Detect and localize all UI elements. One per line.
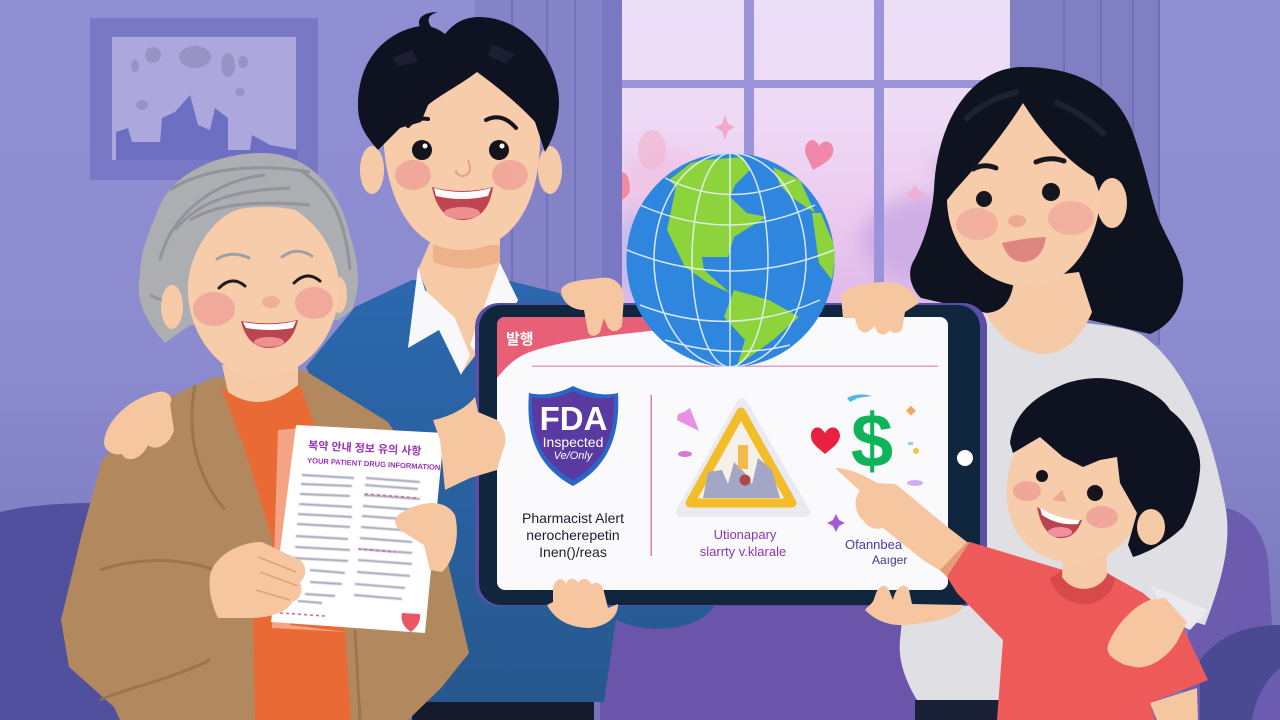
man sweater — [306, 280, 715, 702]
man's hand on granny's shoulder — [104, 392, 174, 459]
hands holding tablet — [433, 278, 963, 628]
floating hearts — [805, 140, 833, 170]
sofa right cushion — [1200, 625, 1280, 720]
child sleeve cuff — [940, 542, 970, 577]
man ears — [360, 146, 562, 194]
right curtain — [1010, 0, 1159, 345]
heart icon — [811, 427, 840, 454]
window clouds — [608, 145, 1010, 300]
granny cheeks — [193, 287, 333, 326]
man hair — [358, 17, 559, 152]
woman hair — [910, 67, 1183, 334]
window — [603, 0, 1010, 345]
paper logo — [402, 613, 420, 632]
child — [835, 378, 1208, 720]
caption three: Ofannbea — [845, 537, 903, 552]
caption three line two: Aaıger — [872, 553, 907, 567]
man eyes and brows — [408, 117, 516, 160]
granny jacket shadows — [100, 385, 360, 720]
paper heading: 복약 안내 정보 유의 사항 — [308, 438, 422, 458]
paper text lines — [293, 475, 420, 603]
man mouth — [432, 187, 493, 220]
granny ears — [161, 277, 347, 329]
graticule — [627, 153, 834, 367]
bottom right hand — [865, 586, 963, 625]
tablet — [475, 303, 987, 606]
man cheeks — [395, 160, 528, 190]
man hair highlight — [392, 44, 515, 66]
verify label: Ve/Only — [554, 450, 594, 462]
caption one: Pharmacist Alert — [522, 510, 624, 526]
greenland — [773, 167, 815, 213]
caption two: Utionapary — [714, 527, 777, 542]
tablet header wave — [497, 317, 660, 378]
south america — [724, 290, 799, 366]
child nose — [1052, 490, 1067, 502]
child face — [1007, 420, 1141, 563]
FDA label: FDA — [540, 400, 607, 437]
woman — [900, 67, 1227, 720]
top left hand — [561, 278, 624, 336]
africa edge — [812, 213, 836, 280]
child shirt — [947, 542, 1208, 720]
woman neck — [986, 272, 1092, 354]
document — [209, 425, 457, 633]
woman ear — [1097, 178, 1127, 228]
caption one line two: nerocherepetin — [526, 527, 620, 543]
globe — [626, 153, 836, 367]
backing sheet — [272, 428, 347, 632]
granny — [61, 153, 469, 720]
granny sweater — [222, 380, 351, 720]
man — [306, 12, 715, 720]
woman cheeks — [956, 201, 1094, 240]
man collar right — [470, 263, 518, 350]
man collar — [408, 267, 470, 375]
sofa right back — [1180, 507, 1280, 720]
paper subheading: YOUR PATIENT DRUG INFORMATION — [307, 456, 441, 472]
left curtain — [475, 0, 622, 320]
man neck — [418, 235, 518, 374]
woman trousers — [915, 700, 1000, 720]
FDA shield — [528, 386, 618, 486]
top right hand — [841, 282, 919, 335]
woman mouth — [1002, 237, 1046, 262]
woman sleeve cuff — [1150, 585, 1208, 630]
woman sweater — [900, 313, 1227, 700]
sofa centre — [600, 600, 920, 720]
sparkles — [677, 394, 923, 532]
child arm and pointing hand — [835, 468, 967, 575]
tablet screen — [497, 317, 948, 590]
hand on child shoulder — [1107, 598, 1187, 667]
child ear — [1137, 509, 1165, 545]
granny neck — [222, 365, 298, 402]
child mouth — [1037, 507, 1082, 538]
child lower arm — [1150, 688, 1198, 720]
granny hair strands — [150, 168, 350, 302]
camera dot — [957, 450, 973, 466]
woman eyes and brows — [973, 159, 1064, 207]
paper pink accents — [280, 494, 418, 616]
caption one line three: Inen()/reas — [539, 544, 607, 560]
hand on paper left — [209, 542, 305, 618]
granny face — [188, 207, 339, 378]
left side hand — [433, 397, 505, 490]
child eyes — [1036, 470, 1103, 501]
man neck shadow — [433, 245, 500, 268]
north america — [667, 157, 767, 293]
paper sheet — [271, 425, 444, 633]
woman face — [947, 103, 1100, 287]
caption two line two: slarrty v.klarale — [700, 544, 786, 559]
man cowlick — [419, 12, 438, 28]
tablet header text: 발행 — [506, 331, 534, 348]
column divider — [650, 395, 652, 556]
tablet bezel — [475, 303, 987, 606]
man nose — [456, 160, 470, 176]
child collar — [1050, 570, 1115, 604]
man trousers — [412, 702, 594, 720]
child hair — [1010, 378, 1200, 557]
woman hair highlight — [965, 92, 1105, 135]
inspected label: Inspected — [543, 434, 603, 450]
finger lines — [256, 557, 298, 600]
granny mouth — [241, 320, 298, 348]
granny eyes and brows — [217, 251, 320, 288]
sofa left arm — [0, 503, 130, 720]
granny hair — [139, 153, 358, 343]
hand on paper right — [395, 503, 457, 572]
woman nose — [1008, 215, 1026, 227]
sofa — [0, 503, 1280, 720]
granny nose — [262, 296, 280, 308]
granny jacket — [61, 370, 469, 720]
man face — [383, 60, 540, 250]
child neck — [1062, 550, 1107, 589]
warning triangle — [681, 403, 805, 512]
dollar sign: $ — [851, 399, 893, 484]
header rule — [532, 366, 938, 367]
framed picture — [90, 18, 318, 180]
child cheeks — [1013, 481, 1118, 528]
bottom left hand — [547, 579, 618, 628]
